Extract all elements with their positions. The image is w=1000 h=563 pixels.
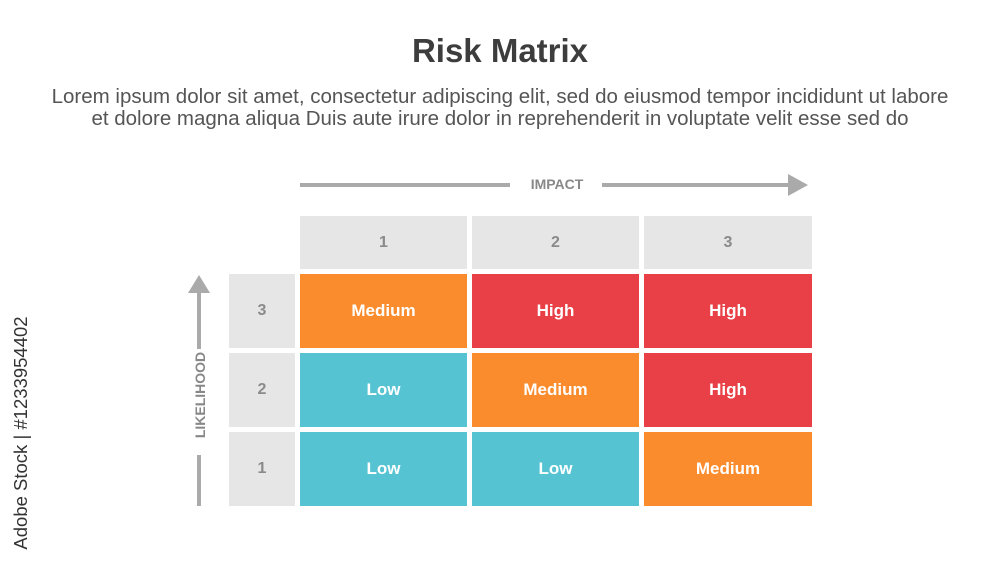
cell 2-3 [644, 353, 812, 427]
cell 3-2: High [537, 301, 574, 320]
cell 1-2 [472, 432, 639, 506]
cell 3-3: High [709, 301, 747, 320]
row label 3 [229, 274, 295, 348]
header: impact 2: 2 [551, 234, 560, 250]
cell 2-1 [300, 353, 467, 427]
cell 3-1: Medium [351, 301, 416, 320]
subtitle [52, 85, 948, 130]
matrix [229, 216, 812, 506]
row label 1: 1 [258, 460, 266, 477]
header: impact 2 [472, 216, 639, 269]
watermark id: Adobe Stock | #1233954402 [10, 316, 31, 550]
cell 1-2: Low [538, 459, 572, 478]
cell 2-3: High [709, 380, 747, 399]
likelihood arrow [188, 275, 210, 506]
cell 2-2 [472, 353, 639, 427]
cell 1-3 [644, 432, 812, 506]
row label 2: 2 [258, 381, 266, 398]
header: impact 1 [300, 216, 467, 269]
row label 3: 3 [258, 302, 266, 319]
row label 2 [229, 353, 295, 427]
title: Risk Matrix [412, 32, 588, 69]
subtitle: et dolore magna aliqua Duis aute irure dolor in reprehenderit in voluptate velit esse sed do [91, 107, 909, 130]
cell 2-2: Medium [523, 380, 588, 399]
likelihood arrow: LIKELIHOOD [192, 352, 208, 438]
impact arrow [300, 174, 808, 196]
cell 2-1: Low [366, 380, 400, 399]
cell 3-2 [472, 274, 639, 348]
header: impact 3: 3 [724, 234, 732, 250]
cell 3-3 [644, 274, 812, 348]
cell 3-1 [300, 274, 467, 348]
row label 1 [229, 432, 295, 506]
header: impact 1: 1 [379, 234, 388, 250]
cell 1-3: Medium [696, 459, 760, 478]
cell 1-1: Low [366, 459, 400, 478]
header: impact 3 [644, 216, 812, 269]
impact arrow: IMPACT [531, 176, 583, 192]
subtitle: Lorem ipsum dolor sit amet, consectetur adipiscing elit, sed do eiusmod tempor incididunt ut labore [52, 85, 948, 108]
cell 1-1 [300, 432, 467, 506]
